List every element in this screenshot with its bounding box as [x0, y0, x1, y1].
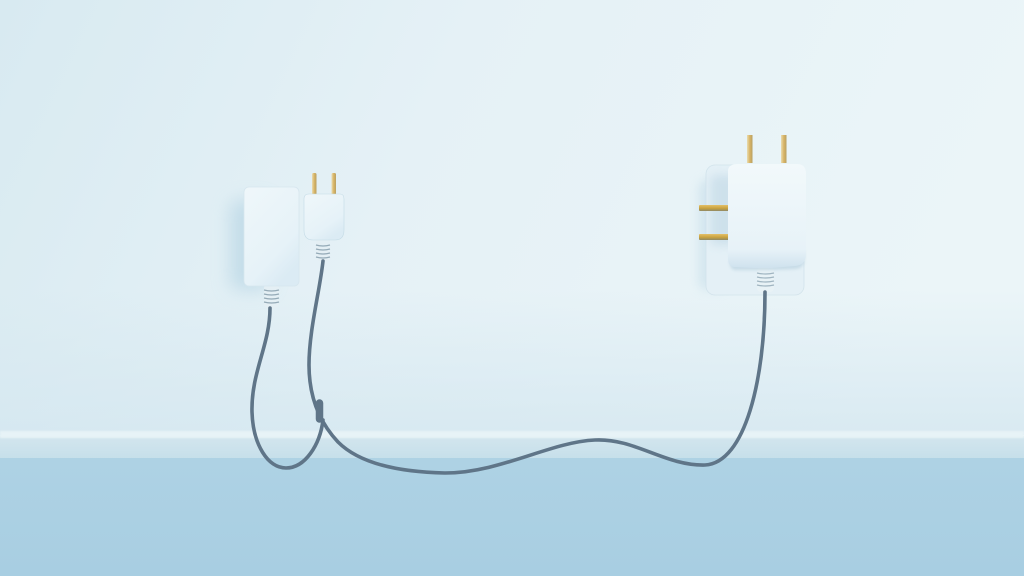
strain relief: large charger	[757, 267, 774, 292]
prongs: small plug	[312, 173, 336, 195]
top prongs	[747, 135, 786, 163]
wall plate shadow	[698, 180, 728, 290]
strain relief: small plug	[316, 238, 330, 261]
wall background	[0, 0, 1024, 440]
cables	[252, 261, 765, 473]
wall plate	[706, 165, 804, 295]
large charger body	[728, 164, 806, 268]
baseboard	[0, 431, 1024, 459]
cable end knob	[316, 403, 323, 419]
floor	[0, 458, 1024, 576]
cable: adapter loop	[252, 308, 323, 468]
plate inner shadow	[710, 175, 738, 245]
wall shadow: small charger	[230, 200, 270, 290]
cable: small plug	[309, 261, 765, 473]
large charger body shadow	[730, 250, 804, 270]
side prongs	[699, 205, 729, 240]
large charger group	[698, 135, 806, 295]
strain relief: adapter	[264, 284, 279, 308]
adapter body	[244, 187, 299, 286]
small plug body	[304, 194, 344, 240]
small charger group	[230, 173, 344, 308]
